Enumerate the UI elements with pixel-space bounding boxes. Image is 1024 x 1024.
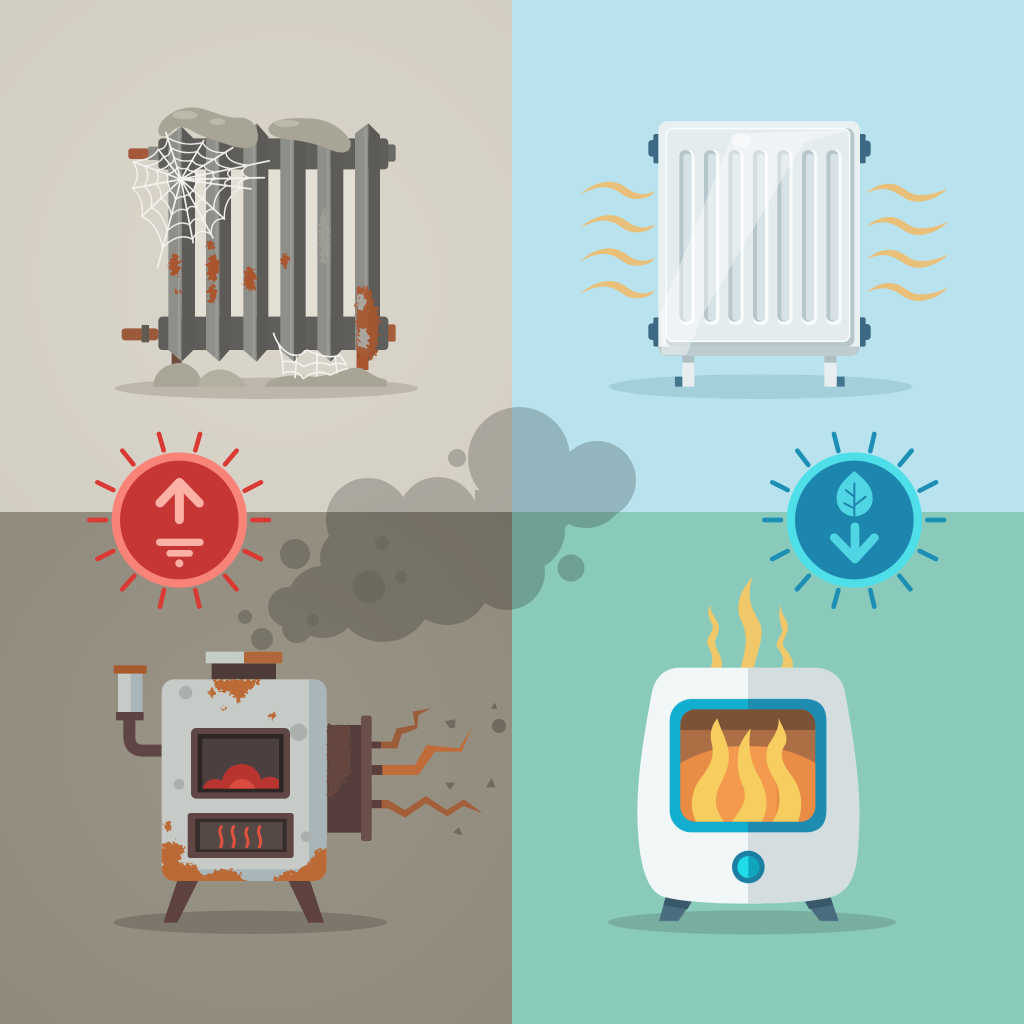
panel: background top left [0,0,512,512]
flames [692,717,801,822]
stove body [162,679,328,883]
legs [659,897,839,921]
smoke cloud [238,407,636,650]
stove body [637,668,859,904]
cracked pipes [372,708,483,818]
cobweb top left [132,132,270,268]
radiator slots [679,150,842,325]
icon: red sun badge, rising cost arrow [89,434,269,607]
chimney and cap [206,652,282,679]
icon: blue sun badge, leaf with down arrow [764,434,944,607]
rocks at the base [153,363,387,387]
fire door [191,728,290,806]
heat waves left [580,182,655,298]
rust patches [170,240,379,360]
fire window [670,698,826,832]
illustration: clean modern white radiator [580,121,948,399]
bars and dot [156,539,204,567]
rays [89,434,269,607]
left pipe [114,665,162,751]
panel: background bottom left [0,512,512,1024]
legs [163,881,324,923]
rust patches [162,679,328,883]
down arrow [834,527,874,559]
debris [445,703,506,835]
moss on top [158,107,351,153]
ash door with heat squiggles [188,813,294,858]
heat waves right [866,184,948,301]
cobweb bottom [273,333,348,378]
smoke inner dark puffs [307,536,407,626]
up arrow [160,482,199,520]
feet [675,356,845,387]
valves [648,134,871,347]
illustration: clean modern stove [608,577,896,934]
panel: background bottom right [512,512,1024,1024]
steam [707,577,793,668]
glass highlight [660,130,848,355]
control knob [732,851,765,883]
flue box [327,716,372,841]
rays [764,434,944,607]
illustration: old rusty radiator with cobwebs [115,107,418,399]
panel: background top right [512,0,1024,512]
leaf [837,471,873,517]
illustration: old rusty stove [113,652,506,934]
